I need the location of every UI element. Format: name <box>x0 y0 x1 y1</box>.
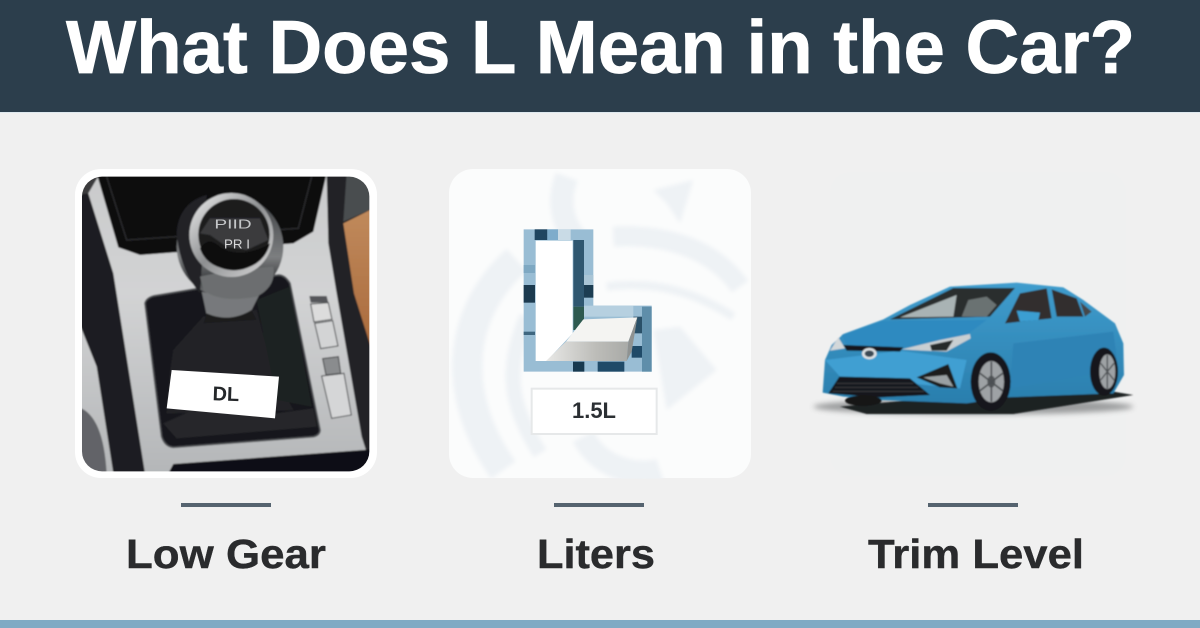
label: low gear: Low Gear <box>126 531 326 577</box>
boot fabric <box>167 310 293 413</box>
panel: liters graphic <box>449 169 751 478</box>
windows <box>890 288 1015 319</box>
white card <box>449 169 751 478</box>
header band with title <box>0 0 1200 113</box>
title: What Does L Mean in the Car? <box>66 5 1135 89</box>
gear shifter photo: PR I <box>224 237 250 252</box>
gear shifter photo: DL <box>212 383 240 406</box>
pale card <box>830 172 1126 476</box>
boot tray <box>145 275 320 447</box>
photo frame <box>75 169 377 478</box>
panel: trim level car <box>813 172 1133 476</box>
headlight <box>902 334 971 352</box>
value box 1.5L <box>532 389 657 434</box>
label: liters: Liters <box>537 531 655 577</box>
liters illustration <box>467 177 740 472</box>
side buttons <box>309 296 328 303</box>
bottom accent bar <box>0 620 1200 628</box>
panel: low gear photo <box>75 169 377 478</box>
column: low gear caption <box>126 503 326 577</box>
value box 1.5L: 1.5L <box>572 398 616 423</box>
knob <box>177 195 283 298</box>
column: trim level caption <box>868 503 1084 577</box>
wheels <box>845 395 882 406</box>
blue sedan <box>813 283 1133 415</box>
3D block <box>566 317 637 342</box>
knob lettering: PIID <box>214 216 252 231</box>
sticker label <box>167 370 279 418</box>
gear shifter photo <box>77 173 373 473</box>
faint circular backdrop <box>467 177 740 472</box>
body <box>823 283 1124 403</box>
lower grille <box>828 377 930 397</box>
column: liters caption <box>537 503 655 577</box>
L inner white <box>536 241 573 361</box>
L outline mosaic <box>524 229 652 372</box>
label: trim level: Trim Level <box>868 531 1084 577</box>
